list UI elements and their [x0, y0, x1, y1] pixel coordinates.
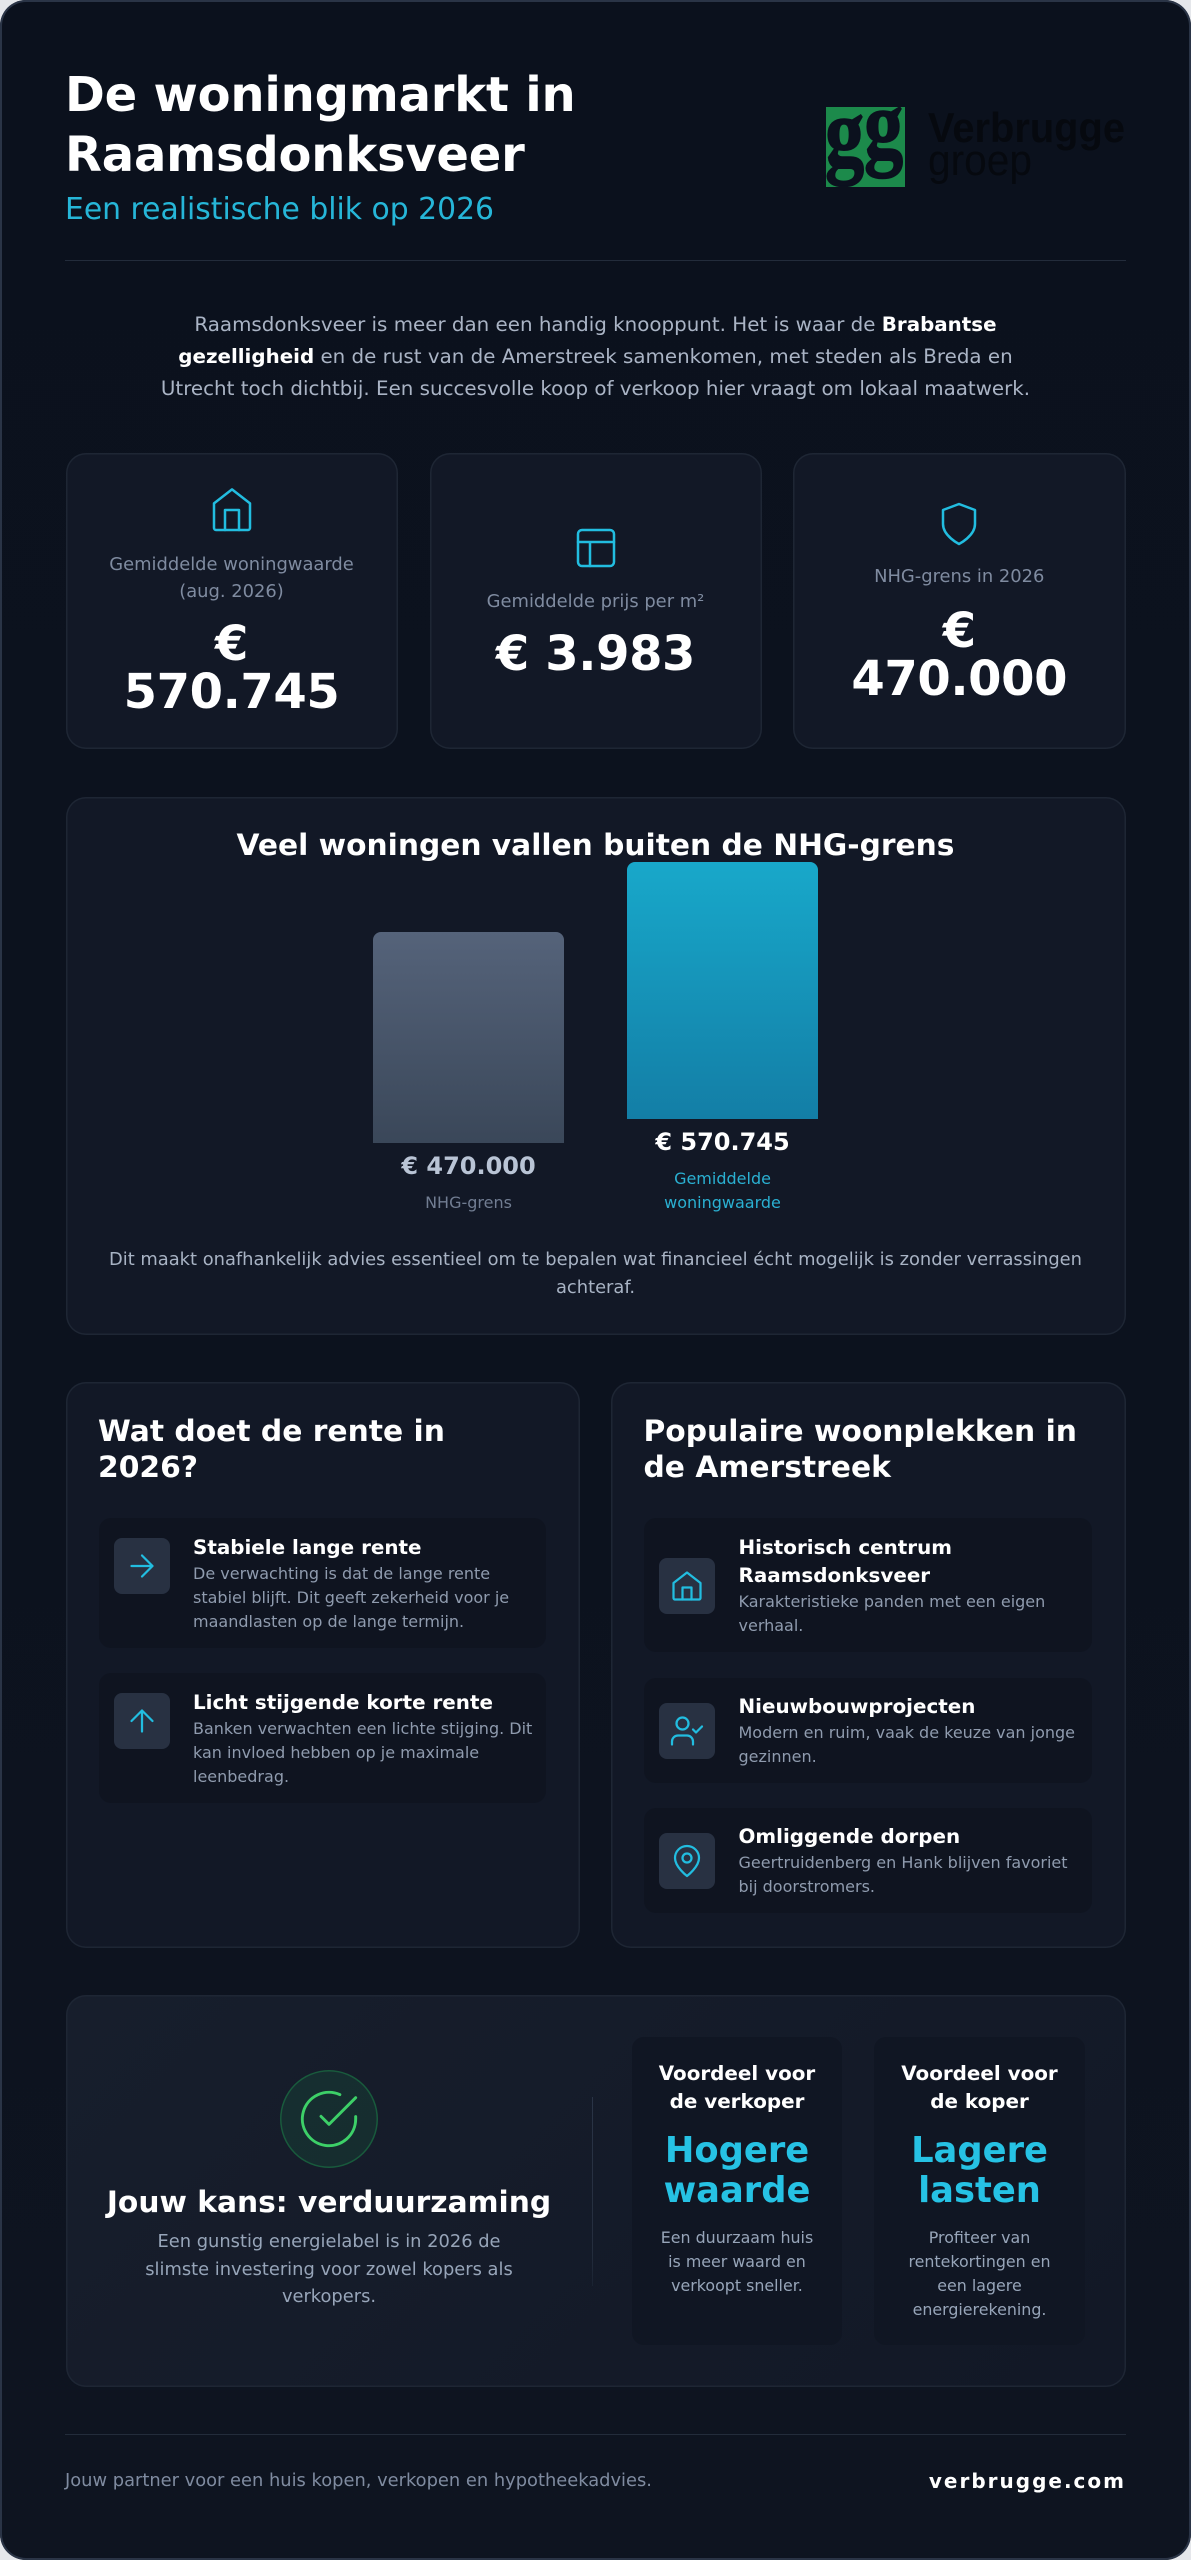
card text: Een duurzaam huis: [661, 2228, 813, 2247]
intro text: Utrecht toch dichtbij. Een succesvolle koop of verkoop hier vraagt om lokaal maatwerk.: [161, 377, 1030, 400]
icon: map pin: [659, 1833, 715, 1889]
card text: rentekortingen en: [908, 2252, 1051, 2271]
panel: prijs per m2: [430, 453, 762, 749]
heading: de Amerstreek: [644, 1450, 891, 1485]
icon: arrow right: [114, 1538, 170, 1594]
heading: Wat doet de rente in: [98, 1414, 445, 1449]
panel: verduurzaming: [66, 1995, 1126, 2387]
card text: [661, 2228, 813, 2295]
item text: De verwachting is dat de lange rente: [193, 1564, 490, 1583]
icon: layout: [576, 528, 616, 568]
bar label: NHG-grens: NHG-grens: [425, 1193, 512, 1212]
chart note: achteraf.: [556, 1277, 635, 1298]
label: Gemiddelde prijs per m²: [487, 590, 704, 612]
card value: [911, 2130, 1048, 2211]
item text: stabiel blijft. Dit geeft zekerheid voor je: [193, 1588, 509, 1607]
icon: shield: [942, 502, 976, 546]
bar label: woningwaarde: Gemiddelde: [674, 1169, 771, 1188]
bar label: woningwaarde: woningwaarde: [664, 1193, 781, 1212]
bar label: woningwaarde: [664, 1169, 781, 1212]
card value: waarde: [664, 2170, 810, 2211]
icon: house: [212, 488, 252, 532]
panel: rente: [66, 1382, 580, 1948]
card heading: de koper: [930, 2090, 1029, 2113]
card text: is meer waard en: [668, 2252, 806, 2271]
value: €: [943, 603, 976, 659]
item text: Geertruidenberg en Hank blijven favoriet: [738, 1853, 1068, 1872]
card value: Lagere: [911, 2130, 1048, 2171]
card heading: [658, 2062, 816, 2113]
item text: leenbedrag.: [193, 1767, 289, 1786]
item text: Omliggende dorpen: [738, 1825, 960, 1848]
icon: house: [659, 1558, 715, 1614]
value: €: [215, 616, 248, 672]
item text: kan invloed hebben op je maximale: [193, 1743, 479, 1762]
title: [65, 67, 575, 183]
value: [124, 616, 339, 720]
item text: [193, 1536, 509, 1631]
item text: Karakteristieke panden met een eigen: [738, 1592, 1045, 1611]
title: Raamsdonksveer: [65, 127, 525, 183]
bar value: 570.745: € 570.745: [655, 1128, 790, 1156]
label: NHG-grens in 2026: [874, 566, 1044, 586]
value: € 3.983: [496, 626, 695, 682]
icon: user check: [659, 1703, 715, 1759]
value: 470.000: [851, 651, 1067, 707]
panel: NHG chart: [66, 797, 1126, 1335]
value: [851, 603, 1067, 707]
card text: een lagere: [937, 2276, 1022, 2295]
item text: [738, 1536, 1045, 1635]
intro text: Raamsdonksveer is meer dan een handig knooppunt. Het is waar de Brabantse: [194, 313, 997, 336]
card heading: Voordeel voor: [901, 2062, 1058, 2085]
value: 570.745: [124, 664, 339, 720]
card heading: de verkoper: [670, 2090, 804, 2113]
heading: [644, 1414, 1077, 1485]
card: verkoper: [632, 2037, 842, 2345]
panel: gemiddelde woningwaarde: [66, 453, 398, 749]
item text: Banken verwachten een lichte stijging. Dit: [193, 1719, 532, 1738]
card text: Profiteer van: [929, 2228, 1030, 2247]
intro text: [161, 313, 1030, 400]
item text: gezinnen.: [738, 1747, 817, 1766]
card value: Hogere: [665, 2130, 809, 2171]
heading: Jouw kans: verduurzaming: [107, 2185, 551, 2220]
item: nieuwbouw: [644, 1678, 1092, 1783]
item text: Nieuwbouwprojecten: [738, 1695, 975, 1718]
logo: Verbrugge groep: [826, 107, 1125, 187]
label: [109, 554, 354, 602]
item text: verhaal.: [738, 1616, 803, 1635]
item: centrum: [644, 1518, 1092, 1652]
item: lange rente: [98, 1518, 546, 1648]
footer url: verbrugge.com: [929, 2469, 1126, 2493]
bar value: 470.000: € 470.000: [401, 1152, 536, 1180]
panel: woonplekken: [611, 1382, 1126, 1948]
icon: check circle: [280, 2070, 378, 2168]
item text: Stabiele lange rente: [193, 1536, 422, 1559]
item text: Historisch centrum: [738, 1536, 952, 1559]
card value: lasten: [918, 2170, 1041, 2211]
text: verkopers.: [282, 2286, 376, 2307]
title: De woningmarkt in: [65, 67, 575, 123]
text: Een gunstig energielabel is in 2026 de: [157, 2231, 501, 2252]
panel: NHG-grens: [793, 453, 1126, 749]
footer text: Jouw partner voor een huis kopen, verkopen en hypotheekadvies.: [65, 2470, 652, 2491]
bar: NHG-grens: [373, 932, 564, 1143]
item text: Licht stijgende korte rente: [193, 1691, 493, 1714]
chart note: Dit maakt onafhankelijk advies essentieel om te bepalen wat financieel écht mogelijk is zonder verrassingen: [109, 1249, 1082, 1270]
item text: maandlasten op de lange termijn.: [193, 1612, 464, 1631]
card: koper: [874, 2037, 1085, 2345]
card value: [664, 2130, 810, 2211]
card text: [908, 2228, 1051, 2319]
item: korte rente: [98, 1673, 546, 1803]
heading: 2026?: [98, 1450, 198, 1485]
heading: Populaire woonplekken in: [644, 1414, 1077, 1449]
subtitle: Een realistische blik op 2026: [65, 192, 494, 227]
heading: [98, 1414, 445, 1485]
intro text: gezelligheid en de rust van de Amerstreek samenkomen, met steden als Breda en: [178, 345, 1013, 368]
item text: [738, 1695, 1075, 1766]
label: Gemiddelde woningwaarde: [109, 554, 354, 574]
item text: [193, 1691, 532, 1786]
card heading: Voordeel voor: [659, 2062, 815, 2085]
text: slimste investering voor zowel kopers als: [145, 2259, 513, 2280]
bar: woningwaarde: [627, 862, 818, 1119]
card text: energierekening.: [913, 2300, 1046, 2319]
chart heading: Veel woningen vallen buiten de NHG-grens: [237, 828, 954, 863]
text: [145, 2231, 513, 2307]
card heading: [901, 2062, 1058, 2113]
label: (aug. 2026): [179, 580, 284, 602]
item text: Modern en ruim, vaak de keuze van jonge: [738, 1723, 1075, 1742]
item text: Raamsdonksveer: [738, 1564, 930, 1587]
item text: [738, 1825, 1068, 1896]
item: dorpen: [644, 1808, 1092, 1913]
chart note: [109, 1249, 1082, 1298]
logo: Verbrugge groep: groep: [928, 136, 1032, 185]
card text: verkoopt sneller.: [671, 2276, 803, 2295]
item text: bij doorstromers.: [738, 1877, 875, 1896]
icon: arrow up: [114, 1693, 170, 1749]
